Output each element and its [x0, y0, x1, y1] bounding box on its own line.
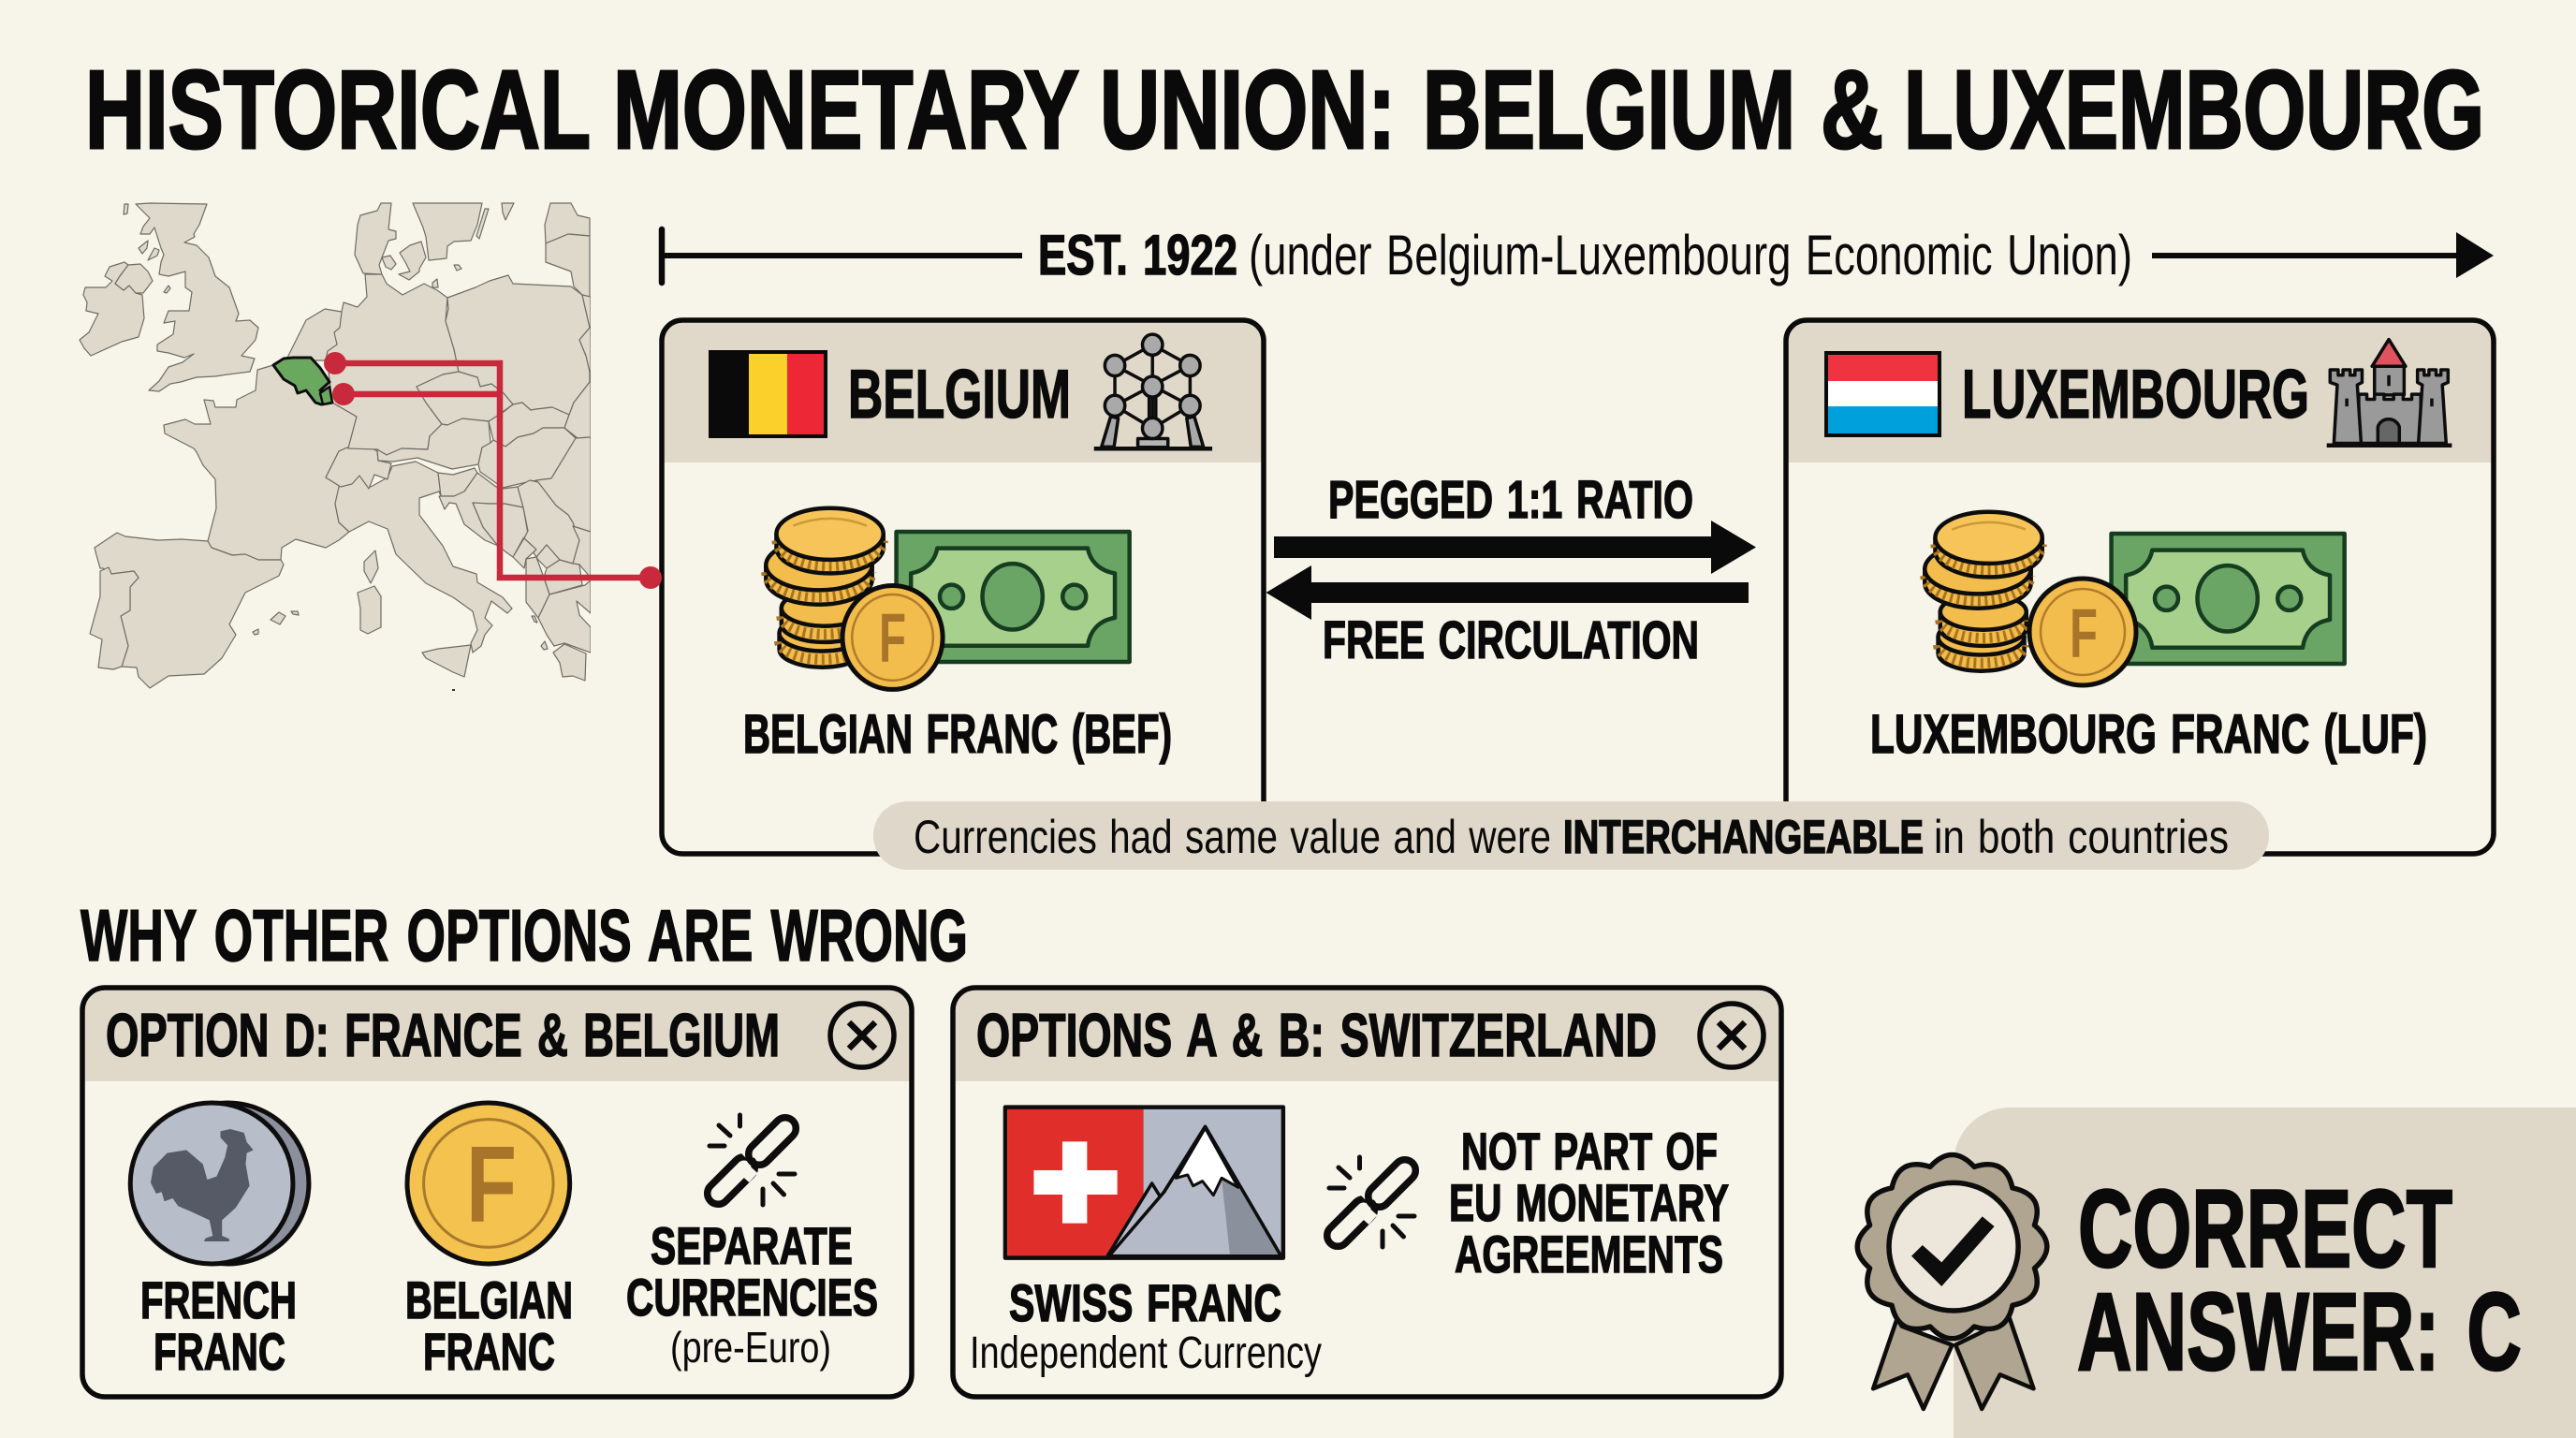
title: &: [1821, 48, 1883, 172]
icon: broken chain: [1323, 1155, 1420, 1251]
arrow: left: [1266, 565, 1749, 620]
Swiss franc label: Independent Currency: [970, 1328, 1322, 1378]
option D heading: OPTION D: FRANCE & BELGIUM: [106, 1001, 780, 1069]
icon: Atomium: [1094, 334, 1212, 448]
Belgian franc label: FRANC: [423, 1322, 555, 1381]
separate currencies label: CURRENCIES: [626, 1268, 878, 1327]
callout: interchangeable: [873, 801, 2269, 870]
Luxembourg heading: LUXEMBOURG: [1962, 357, 2309, 433]
arrow: right: [1274, 521, 1756, 574]
icon: award rosette: [1857, 1154, 2047, 1409]
options A and B heading: OPTIONS A & B: SWITZERLAND: [976, 1001, 1657, 1069]
icon: Belgian franc coin: F: [466, 1123, 517, 1245]
timeline label: (under Belgium-Luxembourg Economic Union): [1249, 224, 2132, 286]
French franc label: FRENCH: [140, 1270, 297, 1329]
panel: options A and B: [953, 988, 1781, 1397]
flag of Belgium: [710, 352, 826, 436]
map of Europe with Belgium highlighted: [80, 203, 591, 691]
flag of Luxembourg: [1826, 353, 1939, 435]
title: MONETARY: [613, 48, 1079, 172]
title: UNION:: [1100, 48, 1396, 172]
Swiss franc label: SWISS FRANC: [1009, 1273, 1281, 1332]
icon: castle: [2327, 340, 2452, 446]
heading: why other options are wrong: WHY OTHER OPTIONS ARE WRONG: [80, 894, 968, 976]
connector lines from map to panel: [324, 352, 662, 589]
icon: Luxembourg banknote and coins: F: [2070, 594, 2098, 672]
correct answer text: [2077, 1167, 2522, 1394]
separate currencies label: (pre-Euro): [670, 1323, 831, 1372]
timeline label: EST. 1922: [1038, 224, 1237, 286]
French franc label: FRANC: [154, 1322, 285, 1381]
not part of EU label: NOT PART OF: [1461, 1122, 1718, 1181]
Belgium heading: BELGIUM: [848, 357, 1071, 433]
separate currencies label: [626, 1216, 878, 1372]
icon: broken chain: [703, 1113, 800, 1209]
icon: Belgian banknote and coins: [766, 508, 1130, 689]
icon: wrong mark: [830, 1004, 894, 1067]
Belgian franc label: BELGIAN: [405, 1270, 573, 1329]
panel: Belgium: [662, 320, 1264, 854]
Swiss franc label: [970, 1273, 1322, 1378]
not part of EU label: [1449, 1122, 1729, 1284]
panel: Luxembourg: [1786, 320, 2494, 854]
icon: Luxembourg banknote and coins: [1925, 512, 2345, 685]
title: [85, 48, 2484, 172]
panel: option D: [82, 988, 912, 1397]
separate currencies label: SEPARATE: [651, 1216, 853, 1275]
Belgian franc label: BELGIAN FRANC (BEF): [743, 704, 1172, 765]
icon: Swiss flag and mountains: [1005, 1108, 1283, 1258]
not part of EU label: EU MONETARY: [1449, 1173, 1729, 1232]
icon: French franc coin: [130, 1103, 309, 1264]
timeline arrow: [662, 224, 2494, 286]
French franc label: [140, 1270, 297, 1381]
free circulation label: FREE CIRCULATION: [1323, 610, 1699, 670]
icon: Belgian banknote and coins: F: [879, 599, 906, 677]
Belgian franc label: [405, 1270, 573, 1381]
not part of EU label: AGREEMENTS: [1455, 1225, 1723, 1284]
panel: correct answer: [1857, 1108, 2576, 1438]
pegged ratio label: PEGGED 1:1 RATIO: [1328, 470, 1693, 530]
title: BELGIUM: [1423, 48, 1795, 172]
callout: interchangeable: in both countries: [1934, 811, 2229, 863]
timeline label: [1038, 224, 2132, 286]
icon: Belgian franc coin: [407, 1103, 570, 1264]
callout: interchangeable: INTERCHANGEABLE: [1563, 811, 1924, 863]
icon: wrong mark: [1700, 1004, 1764, 1067]
callout: interchangeable: Currencies had same value and were: [914, 811, 1551, 863]
title: HISTORICAL: [85, 48, 591, 172]
